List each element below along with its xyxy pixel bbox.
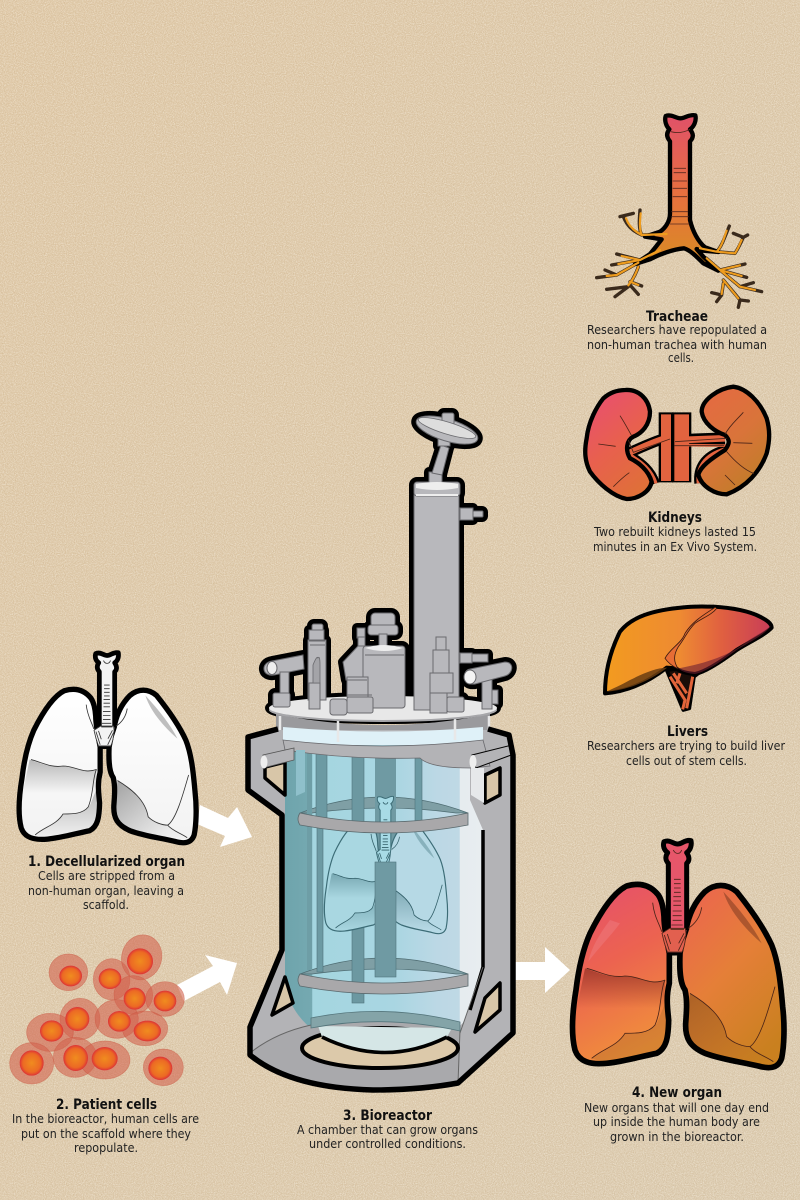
frame windows [265, 762, 500, 1032]
text: tracheae: non-human trachea with human [587, 338, 767, 352]
frame outline [248, 729, 513, 1090]
frame handles [260, 745, 514, 803]
text: patient cells: put on the scaffold where they [21, 1127, 191, 1141]
head plate collar [276, 714, 490, 746]
text: kidneys [593, 510, 757, 554]
text: tracheae: cells. [668, 351, 694, 365]
vessel rods [300, 750, 468, 1003]
arrow: bioreactor to new organ [510, 947, 570, 993]
text: new organ [584, 1085, 769, 1144]
arrow: cells to bioreactor [177, 955, 237, 1001]
top components [264, 410, 512, 715]
arrow: to bioreactor from organ [197, 805, 252, 847]
icon: trachea [597, 115, 762, 307]
text: tracheae: Researchers have repopulated a [587, 323, 767, 337]
text: new organ: up inside the human body are [593, 1115, 760, 1129]
text: decellularized organ: Cells are stripped from a [38, 869, 175, 883]
text: decellularized organ: scaffold. [83, 898, 129, 912]
text: bioreactor: 3. Bioreactor [343, 1108, 432, 1124]
top component silhouettes [264, 410, 512, 720]
text: decellularized organ [28, 854, 185, 912]
text: new organ: 4. New organ [632, 1085, 722, 1101]
text: livers: Livers [667, 724, 708, 740]
text: livers [587, 724, 785, 768]
text: decellularized organ: 1. Decellularized organ [28, 854, 185, 870]
text: bioreactor [297, 1108, 478, 1151]
text: kidneys: Kidneys [648, 510, 702, 526]
text: tracheae: Tracheae [646, 309, 708, 325]
frame front parts [248, 730, 513, 1090]
icon: new organ lungs [573, 840, 784, 1068]
glass vessel [285, 745, 483, 1052]
text: decellularized organ: non-human organ, leaving a [28, 884, 184, 898]
vessel rings [298, 813, 468, 994]
text: livers: cells out of stem cells. [626, 754, 747, 768]
text: new organ: grown in the bioreactor. [610, 1130, 744, 1144]
text: patient cells: In the bioreactor, human cells are [12, 1112, 199, 1126]
text: new organ: New organs that will one day end [584, 1101, 769, 1115]
text: bioreactor: under controlled conditions. [309, 1137, 466, 1151]
frame silhouette [248, 728, 513, 1090]
text: patient cells [12, 1097, 199, 1155]
inner lung [324, 796, 447, 934]
text: kidneys: minutes in an Ex Vivo System. [593, 540, 757, 554]
text: kidneys: Two rebuilt kidneys lasted 15 [593, 525, 756, 539]
icon: liver [605, 606, 772, 710]
icon: kidneys [585, 387, 769, 499]
icon: decellularized lungs [19, 653, 196, 843]
impeller shaft [375, 862, 396, 977]
bottom opening [302, 1011, 460, 1068]
head plate [269, 696, 497, 722]
text: bioreactor: A chamber that can grow organs [297, 1123, 478, 1137]
text: patient cells: repopulate. [74, 1141, 138, 1155]
text: livers: Researchers are trying to build liver [587, 739, 785, 753]
icon: patient cells [10, 930, 184, 1086]
text: patient cells: 2. Patient cells [56, 1097, 157, 1113]
icon: bioreactor [248, 410, 514, 1090]
text: tracheae [587, 309, 767, 365]
